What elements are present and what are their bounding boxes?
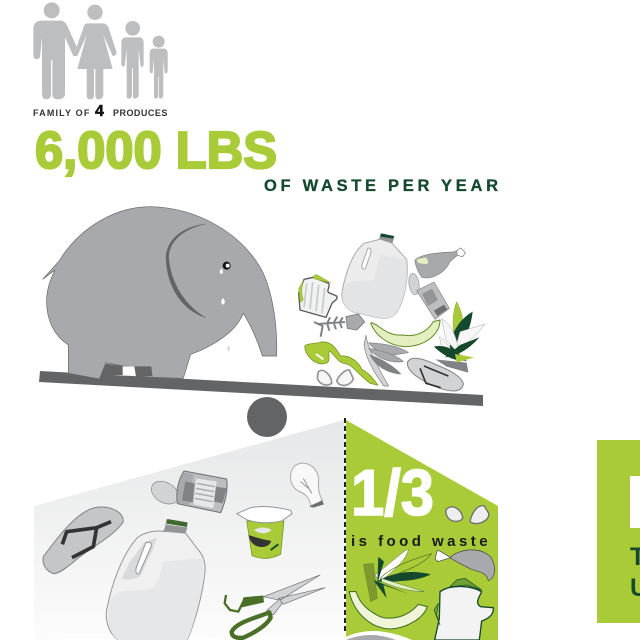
cropped white letter <box>630 476 640 528</box>
seesaw plank <box>39 371 483 406</box>
icon: egg shells <box>446 506 489 524</box>
caption: family of 4 produces: 4 <box>95 103 104 120</box>
icon: family of four <box>33 2 168 99</box>
icon: plate rim at bottom <box>340 631 412 640</box>
icon: melon rind <box>371 320 440 347</box>
icon: pineapple top <box>363 549 432 602</box>
icon: melon rind <box>349 592 427 629</box>
label: is food waste: is food waste <box>351 533 490 550</box>
big fraction 1/3: 1/3 <box>351 456 434 529</box>
caption: family of 4 produces: PRODUCES <box>113 108 169 118</box>
icon: egg shells <box>317 370 353 385</box>
items in gray panel <box>43 463 325 640</box>
icon: milk jug <box>106 519 205 640</box>
caption: family of 4 produces <box>33 103 169 120</box>
icon: flip flop <box>43 507 123 574</box>
icon: flip flop <box>407 358 463 391</box>
icon: bread slice <box>299 275 337 317</box>
icon: fish bone <box>314 314 365 337</box>
heading: 6,000 lbs: 6,000 LBS <box>35 122 277 180</box>
icon: orange peel <box>305 342 378 385</box>
icon: scissors <box>225 575 325 638</box>
icon: yogurt cup <box>237 506 292 558</box>
food items in green panel <box>349 506 495 640</box>
waste pile on seesaw <box>299 233 485 391</box>
icon: chicken leg <box>415 248 465 278</box>
icon: pineapple top <box>434 302 485 373</box>
icon: tin can <box>408 273 449 319</box>
panel divider: dashed line <box>344 418 346 634</box>
icon: tin can <box>147 471 227 513</box>
icon: banana peel <box>364 335 408 386</box>
caption: family of 4 produces: FAMILY OF <box>33 108 91 118</box>
panel: other waste <box>34 420 344 640</box>
icon: bread slice <box>434 578 493 640</box>
panel: cropped green callout <box>597 440 640 623</box>
icon: crying elephant <box>43 207 277 379</box>
icon: milk jug <box>342 233 407 318</box>
seesaw fulcrum <box>247 397 287 437</box>
subheading: of waste per year: OF WASTE PER YEAR <box>264 177 501 195</box>
panel: food waste <box>346 420 498 640</box>
icon: chicken leg <box>435 550 495 581</box>
icon: light bulb <box>291 463 324 508</box>
